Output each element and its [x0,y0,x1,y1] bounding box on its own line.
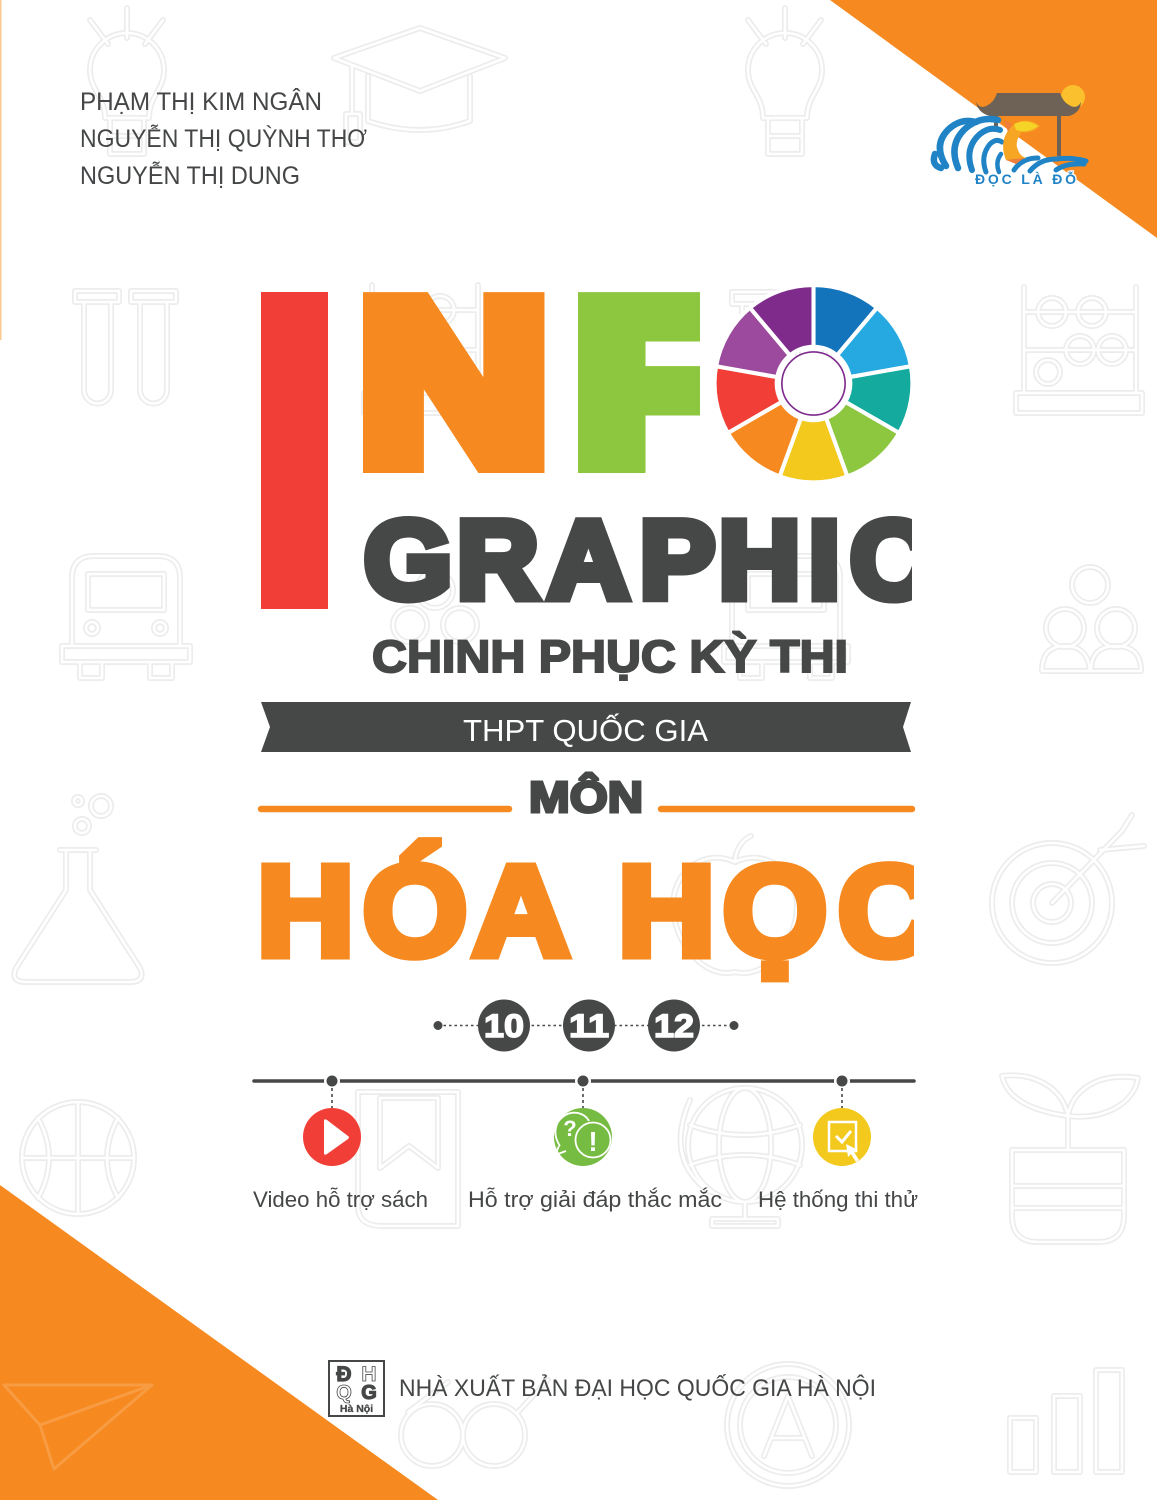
publisher logo: Hà Nội [340,1403,373,1415]
grade selector [434,1000,738,1052]
feature: mock exam [758,1073,918,1212]
author 2: NGUYỄN THỊ QUỲNH THƠ [80,123,367,153]
waves [934,119,1086,172]
publisher logo: G [361,1382,377,1404]
fish [1003,120,1040,164]
corner triangle: top right [830,0,1157,238]
author 1: PHẠM THỊ KIM NGÂN [80,87,322,116]
icon: abacus right [1016,287,1142,413]
logo wordmark: ĐỌC LÀ ĐỖ [975,170,1076,187]
orange rule right [661,806,912,812]
sun [1061,85,1085,109]
icon: test tubes [75,291,176,404]
letter F: F [574,255,740,510]
publisher logo [329,1361,384,1416]
icon: people centre [393,572,477,642]
feature: video [253,1073,428,1212]
banner [261,702,911,752]
grade 10: 10 [484,1008,524,1044]
left edge strip [0,0,2,340]
dotted connector [438,1024,734,1026]
publisher logo: Đ [336,1363,352,1386]
gate [976,93,1081,156]
orange rule left [261,806,509,812]
feature: questions: Hỗ trợ giải đáp thắc mắc [468,1187,722,1212]
publisher logo: H [361,1363,377,1386]
feature: mock exam: Hệ thống thi thử [758,1187,918,1212]
grade 12: 12 [654,1008,694,1044]
letter N: N [359,256,548,510]
icon: bar chart [1010,1370,1122,1472]
authors [80,87,367,190]
icon: letter badge [727,1364,849,1486]
icon: book with bookmark [358,1092,458,1226]
end dot right [730,1021,738,1030]
label: mon: MÔN [529,771,643,822]
icon: people right [1042,567,1141,671]
icon: bus left [62,556,190,678]
feature: questions [468,1073,722,1212]
timeline [253,1073,918,1212]
publisher name: NHÀ XUẤT BẢN ĐẠI HỌC QUỐC GIA HÀ NỘI [399,1373,876,1402]
icon: glasses [401,1380,548,1466]
publisher [329,1361,876,1416]
publisher logo: Q [336,1382,352,1404]
grade 11 [563,1000,615,1052]
title: INFO [261,287,910,609]
icon: graduation cap [334,28,505,142]
icon: target [992,815,1144,963]
subject title: HÓA HỌC [257,839,935,982]
icon: paper plane [4,1385,152,1469]
subtitle: chinh phuc ky thi: CHINH PHỤC KỲ THI [372,631,848,682]
icon: light bulb right [748,8,822,154]
corner triangle: bottom left [0,1185,438,1500]
icon: basketball [22,1102,134,1214]
grade 12 [648,1000,700,1052]
icon: globe [681,1088,802,1226]
banner text: THPT QUỐC GIA [463,712,708,748]
timeline bar [254,1079,914,1083]
icon: bus centre [724,556,848,678]
letter I: I [226,194,361,707]
icon: plant [1002,1075,1138,1242]
end dot left [434,1021,442,1030]
feature: video: Video hỗ trợ sách [253,1187,428,1212]
grade 10 [478,1000,530,1052]
publisher brand logo [934,85,1086,187]
icon: light bulb left [90,8,164,154]
author 3: NGUYỄN THỊ DUNG [80,160,300,190]
feature: questions: ! [588,1126,598,1157]
feature: questions: ? [563,1116,577,1141]
icon: test tube behind wheel [732,292,835,406]
icon: flask [14,796,142,982]
icon: apple [673,836,797,973]
colour wheel letter O [715,285,912,482]
title: GRAPHIC: GRAPHIC [364,499,932,622]
grade 11: 11 [569,1008,609,1044]
banner shape [261,702,911,752]
icon: abacus centre [364,285,488,413]
